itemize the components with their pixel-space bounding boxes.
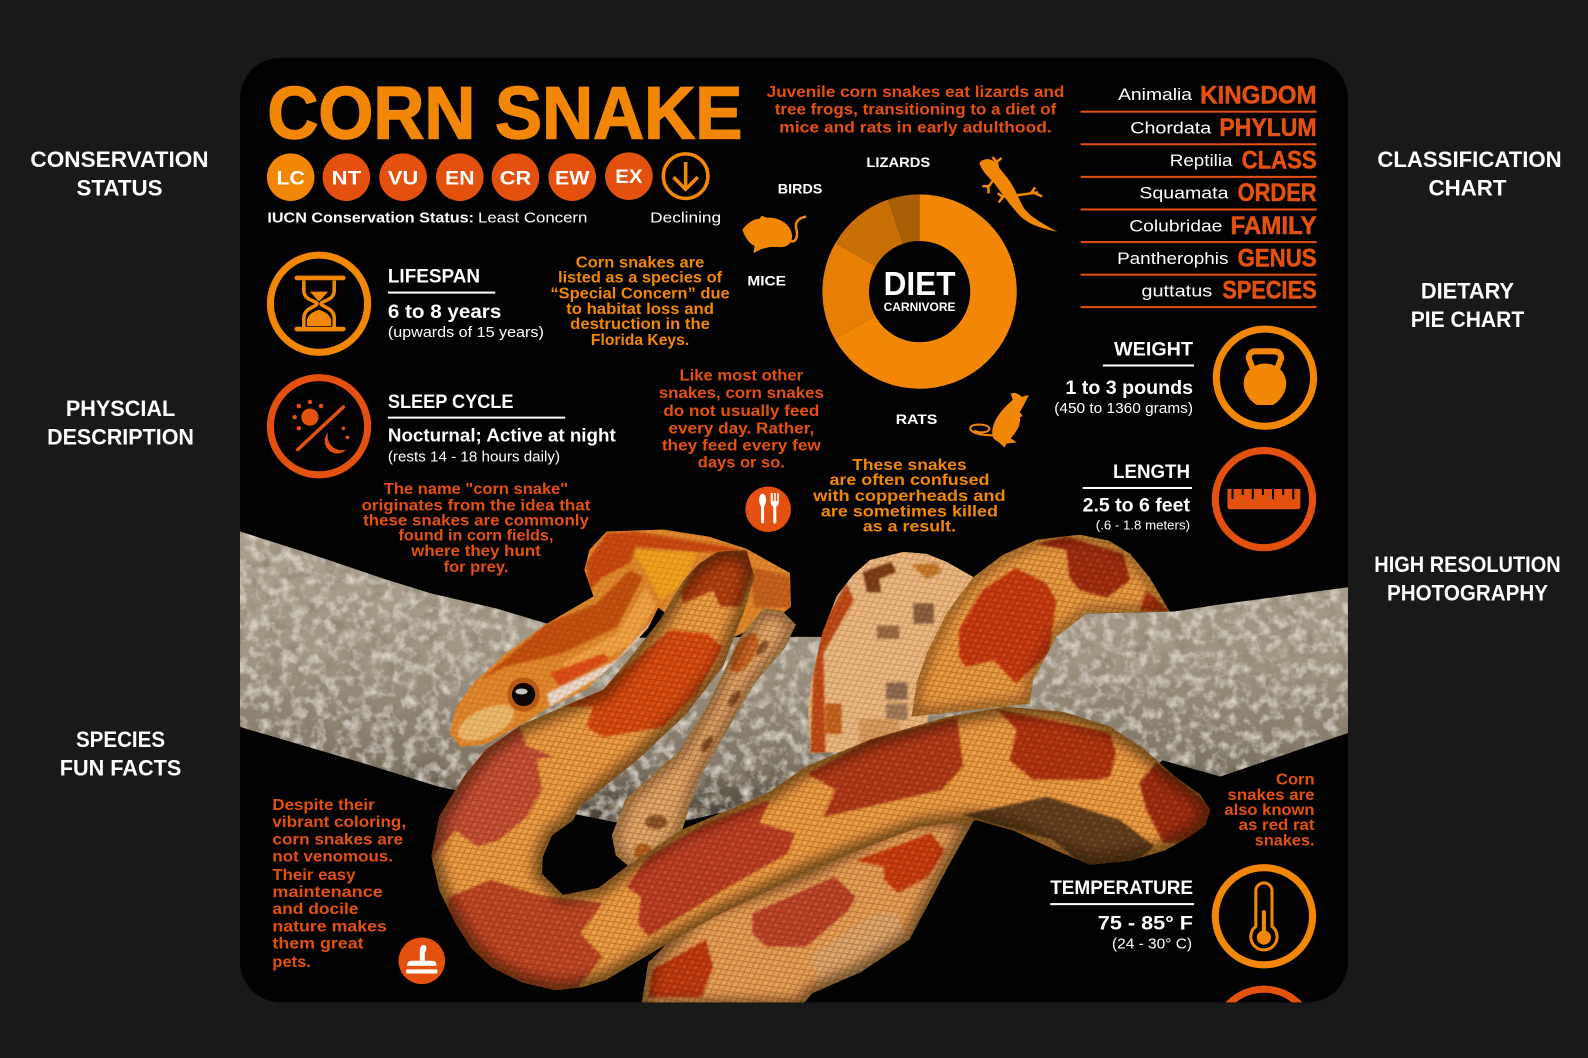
annotation labels: right: PHOTOGRAPHY [1387,580,1548,605]
annotation labels: right: HIGH RESOLUTION [1374,552,1561,577]
length: 2.5 to 6 feet [1083,495,1191,516]
lifespan [270,255,544,352]
conservation status text: IUCN Conservation Status: [267,210,474,227]
photo: snake on branch [240,530,1348,1012]
icon: sun and moon [270,378,368,475]
annotation labels: right: DIETARY [1421,279,1514,304]
annotation labels: left: SPECIES [76,727,165,752]
annotation labels: left: PHYSCIAL [66,396,175,421]
panel: infographic card [240,58,1348,1002]
lifespan: LIFESPAN [388,266,480,287]
annotation labels: right [1374,147,1562,605]
weight [1054,329,1314,426]
classification chart: Squamata [1139,183,1229,202]
diet labels: RATS [896,412,937,428]
fact: juvenile diet [767,84,1064,137]
fact: copperheads: are often confused [829,472,989,489]
fact: not venomous: corn snakes are [272,831,403,848]
weight: WEIGHT [1114,339,1193,360]
temperature: TEMPERATURE [1050,878,1193,899]
conservation status badges: EN [445,168,474,189]
fact: not venomous: and docile [272,901,359,918]
icon: mouse [742,216,806,253]
fact: not venomous: nature makes [272,918,387,935]
saddle markings [425,550,1215,997]
right upper strand [911,535,1170,717]
fact: special concern: Corn snakes are [576,254,705,271]
fact: name origin: originates from the idea that [362,497,591,514]
temperature: (24 - 30° C) [1112,936,1192,953]
annotation labels: right: CHART [1428,175,1507,200]
fact: special concern: to habitat loss and [566,301,714,318]
annotation labels: left [30,147,209,781]
classification chart: Pantherophis [1117,249,1228,268]
fact: juvenile diet: Juvenile corn snakes eat lizards and [767,84,1064,101]
length: (.6 - 1.8 meters) [1096,518,1190,533]
conservation status badges: CR [500,168,531,189]
fact: not venomous: vibrant coloring, [272,814,406,831]
lifespan: 6 to 8 years [388,302,501,323]
classification chart: KINGDOM [1200,81,1317,109]
diet labels: MICE [747,274,786,290]
diet labels: LIZARDS [866,155,930,171]
lifespan: (upwards of 15 years) [388,324,544,341]
icon: kettlebell [1216,329,1314,426]
branch [240,532,1348,822]
fact: special concern: “Special Concern” due [550,286,730,303]
icon: cropped badge at bottom [1226,986,1302,1002]
annotation labels: right: PIE CHART [1411,307,1525,332]
fact: not venomous: Despite their [272,797,375,814]
annotation labels: left: FUN FACTS [60,756,181,781]
fact: name origin [362,481,591,576]
slice: mice [822,243,876,339]
fact: feeding [659,368,824,472]
slice: rats [835,194,1017,389]
conservation status text [267,210,721,227]
icon: fork and spoon [745,486,791,532]
length: LENGTH [1113,462,1190,483]
fact: special concern: listed as a species of [558,269,723,286]
slice: birds [835,200,903,266]
conservation status text: Least Concern [478,210,587,227]
fact: not venomous: not venomous. [272,849,393,866]
icon: stamp [399,938,445,984]
slice: lizards [888,194,920,244]
fact: feeding: Like most other [680,368,803,385]
diet labels: BIRDS [778,181,822,197]
icon: snake eye [507,677,540,712]
sleep cycle: SLEEP CYCLE [388,392,514,413]
classification chart: SPECIES [1222,277,1317,305]
title: CORN SNAKE [267,72,742,155]
conservation status badges: VU [388,168,418,189]
diet donut chart: CARNIVORE [884,300,956,314]
fact: not venomous: Their easy [272,867,356,884]
fact: copperheads: with copperheads and [812,488,1006,505]
weight: (450 to 1360 grams) [1054,400,1193,417]
annotation labels: left: STATUS [76,175,163,200]
fact: special concern [550,254,730,349]
classification chart: ORDER [1238,179,1317,207]
thin back strand [612,608,796,871]
fact: feeding: snakes, corn snakes [659,385,824,402]
conservation status text: Declining [650,210,721,227]
fact: red rat snakes: as red rat [1239,817,1315,834]
icon: thermometer [1215,868,1313,965]
icon: rat [970,393,1029,447]
fact: red rat snakes: Corn [1276,772,1315,789]
icon: declining arrow [663,154,708,198]
fact: feeding: days or so. [698,455,785,472]
fact: name origin: The name "corn snake" [384,481,568,498]
conservation status badges: NT [332,168,361,189]
diet labels [747,155,937,428]
fact: feeding: do not usually feed [663,403,819,420]
annotation labels: right: CLASSIFICATION [1377,147,1562,172]
fact: not venomous [272,797,406,971]
lower coil [642,820,974,1002]
classification chart: FAMILY [1230,212,1317,240]
conservation status badges [267,152,708,201]
icon: hourglass [270,255,368,352]
fact: special concern: destruction in the [570,316,710,333]
sleep cycle: (rests 14 - 18 hours daily) [388,449,560,466]
fact: copperheads: These snakes [852,457,967,474]
diet donut chart: DIET [884,266,956,303]
classification chart: guttatus [1141,282,1212,301]
fact: juvenile diet: tree frogs, transitioning to a diet of [775,101,1057,118]
fact: red rat snakes: also known [1224,802,1315,819]
classification chart: Reptilia [1170,151,1233,170]
fact: not venomous: pets. [272,954,311,971]
fact: feeding: they feed every few [662,438,822,455]
conservation status badges: LC [276,168,305,189]
fact: red rat snakes [1224,772,1315,849]
classification chart: CLASS [1242,147,1317,175]
classification chart: PHYLUM [1219,114,1317,142]
fact: not venomous: maintenance [272,884,383,901]
conservation status badges: EX [615,167,643,188]
annotation labels: left: CONSERVATION [30,147,209,172]
fact: copperheads: are sometimes killed [821,503,998,520]
weight: 1 to 3 pounds [1065,378,1193,399]
sleep cycle: Nocturnal; Active at night [388,424,616,445]
classification chart: Animalia [1118,85,1193,104]
classification chart: Chordata [1130,119,1212,138]
conservation status badges: EW [555,168,590,189]
fact: red rat snakes: snakes. [1255,832,1315,849]
temperature: 75 - 85° F [1098,913,1193,934]
classification chart: Colubridae [1129,216,1222,235]
classification chart: GENUS [1238,244,1317,272]
sleep cycle [270,378,616,475]
fact: not venomous: them great [272,936,364,953]
back neck coil and head [450,530,795,749]
temperature [1050,868,1313,965]
fact: copperheads: as a result. [863,519,956,536]
fact: juvenile diet: mice and rats in early adulthood. [779,120,1052,137]
length [1083,451,1313,548]
annotation labels: left: DESCRIPTION [47,424,194,449]
fact: copperheads [812,457,1006,536]
main body strand [425,550,1215,997]
pale central strand [808,552,982,753]
diet donut chart [822,194,1017,389]
icon: lizard [979,157,1057,232]
fact: name origin: found in corn fields, [399,528,553,545]
fact: red rat snakes: snakes are [1227,787,1315,804]
fact: name origin: these snakes are commonly [363,512,589,529]
fact: name origin: where they hunt [410,543,542,560]
icon: ruler [1215,451,1313,548]
fact: special concern: Florida Keys. [591,332,689,349]
classification chart [1081,81,1317,308]
fact: feeding: every day. Rather, [668,420,814,437]
fact: name origin: for prey. [444,559,508,576]
